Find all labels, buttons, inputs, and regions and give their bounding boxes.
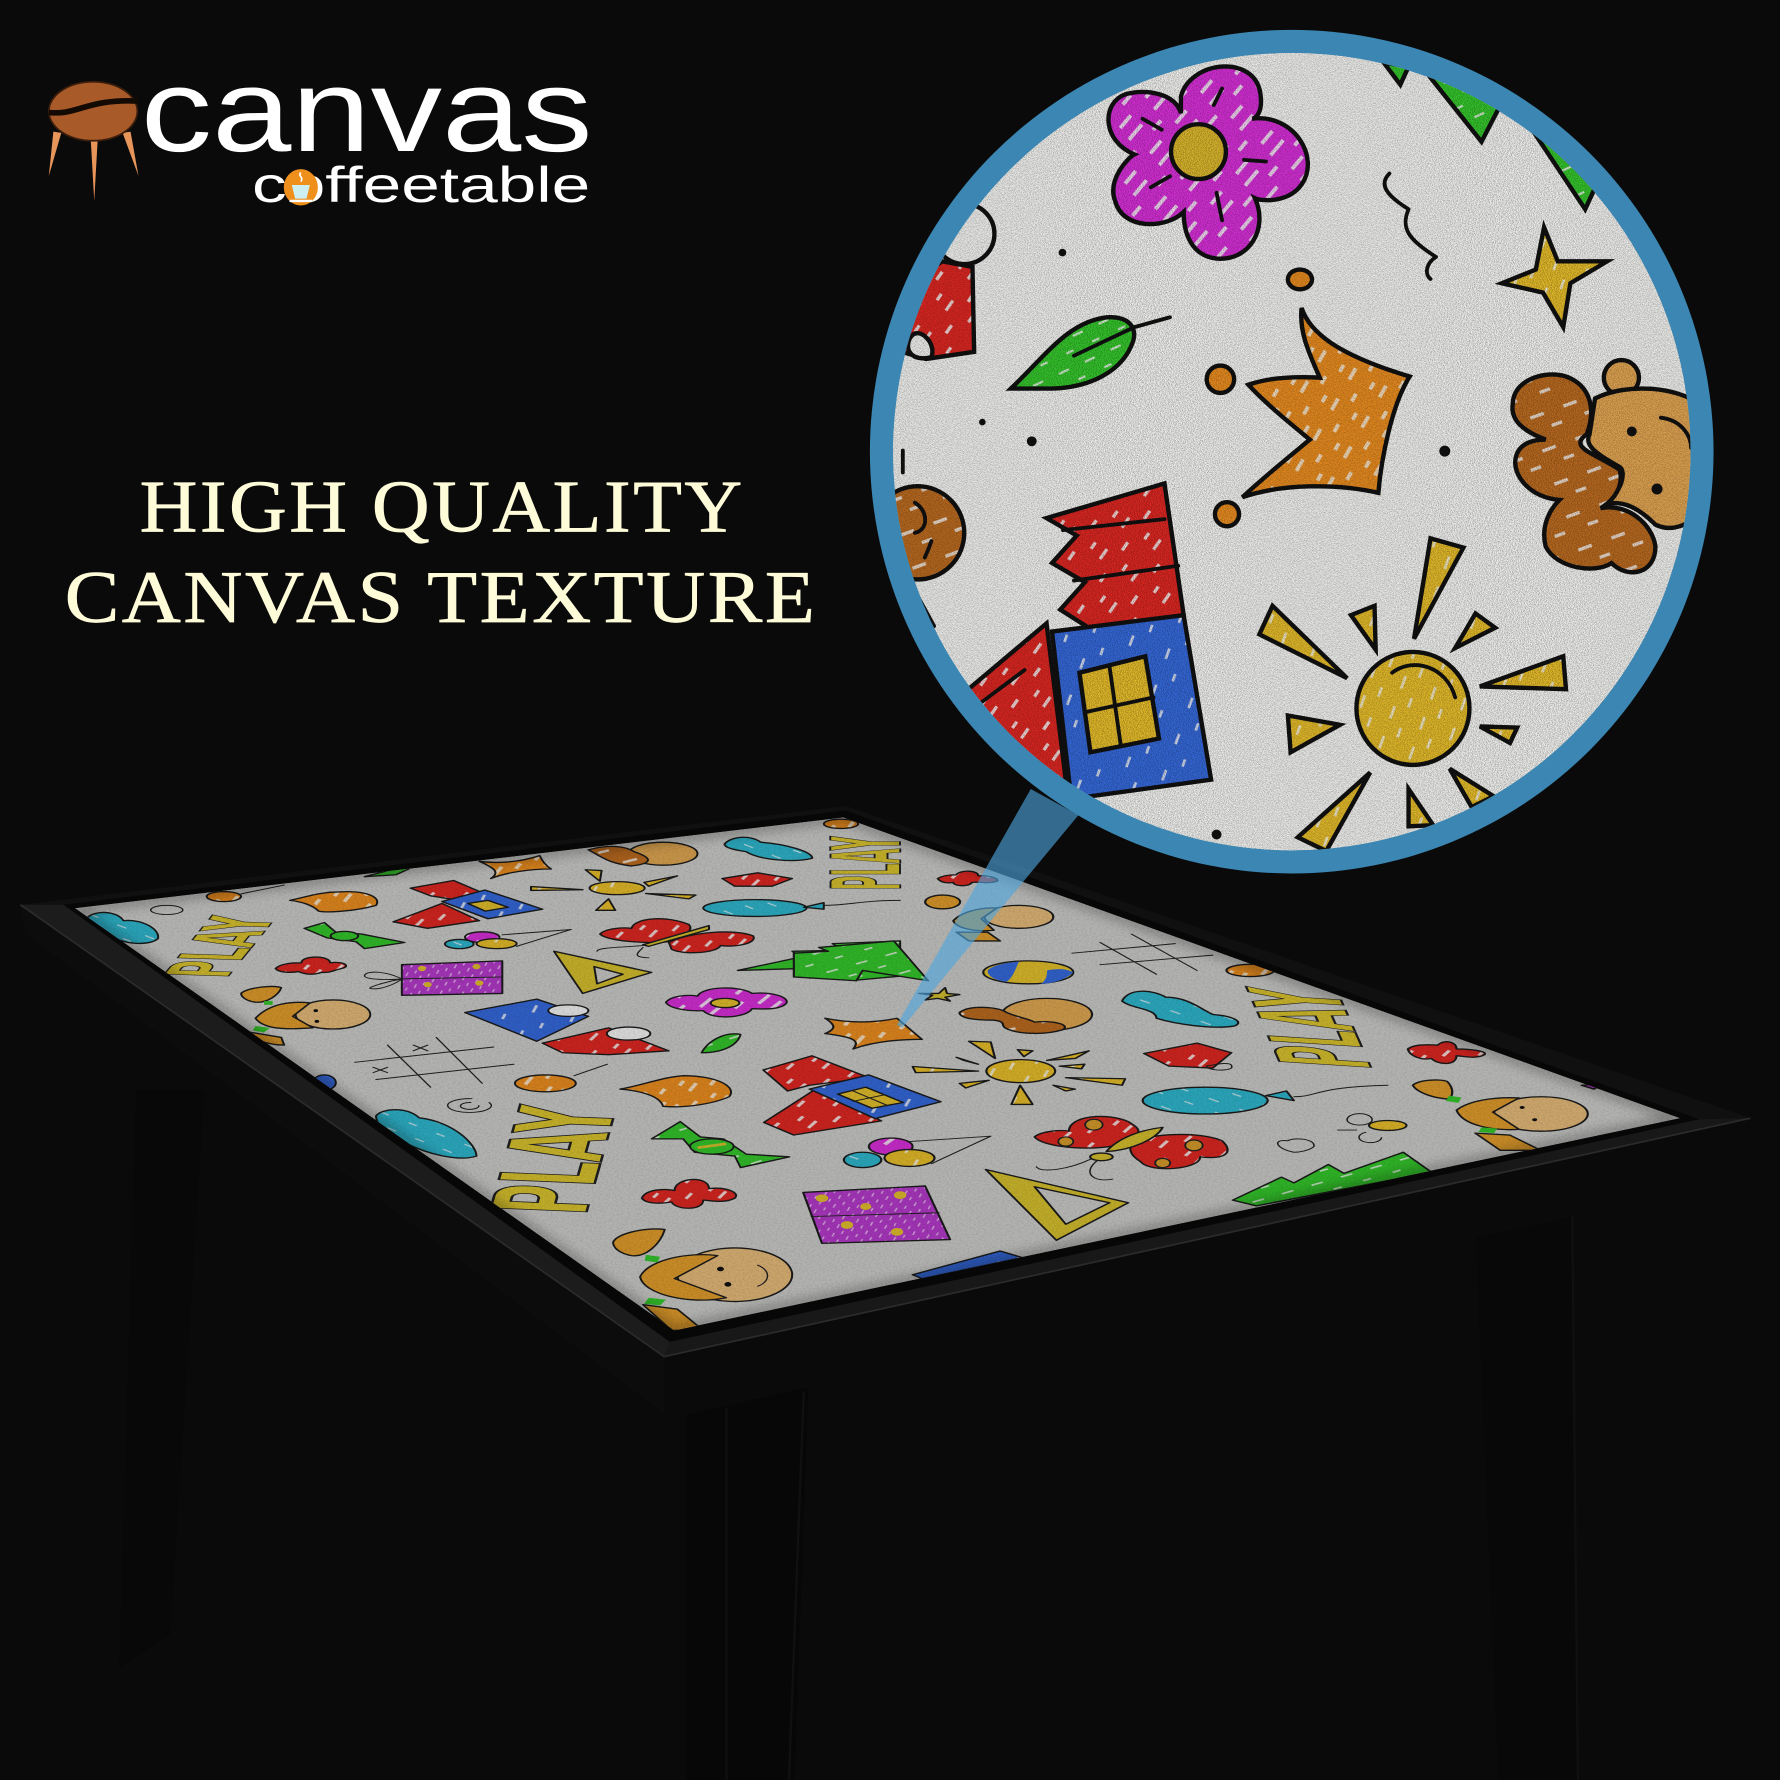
leaf — [1011, 317, 1170, 389]
line one: HIGH QUALITY — [140, 465, 745, 547]
ball — [983, 961, 1073, 984]
lollipop — [151, 885, 284, 915]
doodles: right half of table — [763, 836, 1603, 1279]
icon: coffee cup in wordmark — [284, 169, 318, 205]
truck — [465, 999, 669, 1055]
spiral — [448, 1099, 491, 1112]
cat big — [620, 1076, 731, 1107]
cat blob — [290, 892, 377, 912]
canvas weave overlay — [887, 47, 1699, 859]
logo — [49, 45, 593, 213]
big candy — [652, 1122, 789, 1168]
text: PLAY right: PLAY — [1221, 984, 1402, 1072]
tic tac toe right — [1072, 934, 1213, 974]
gift — [365, 961, 502, 995]
house big — [763, 1056, 941, 1135]
butterfly — [597, 919, 754, 958]
bear — [1512, 360, 1699, 572]
cloud right — [1122, 991, 1238, 1027]
ice cream big — [844, 1136, 991, 1168]
text: big PLAY: PLAY — [464, 1103, 647, 1217]
left red car — [893, 204, 994, 359]
table shading — [75, 817, 1680, 1330]
flower — [1108, 66, 1308, 259]
text: small PLAY: PLAY — [146, 914, 298, 979]
leaf — [702, 1034, 741, 1053]
logo wordmark: coffeetable: coffeetable — [252, 157, 590, 213]
leaf top — [365, 867, 409, 877]
ice cream — [445, 929, 571, 949]
orange dots — [1207, 270, 1312, 526]
surface edge shadow — [75, 817, 1680, 1330]
tic tac toe — [355, 1037, 514, 1087]
big cloud — [376, 1110, 476, 1158]
bear right — [960, 998, 1092, 1033]
star — [1502, 227, 1607, 327]
balloon big — [1143, 1085, 1388, 1114]
red flower top right — [938, 871, 998, 886]
logo wordmark: canvas: canvas — [141, 45, 593, 177]
red flower right — [1408, 1042, 1485, 1063]
blue ring — [870, 30, 1714, 873]
blue ball at edge — [313, 1075, 336, 1090]
red flower big — [642, 1179, 736, 1208]
girl small — [241, 986, 370, 1045]
red cup — [722, 873, 792, 886]
logo icon: coffee bean stool — [49, 82, 138, 201]
magnifier circle: canvas texture close-up — [870, 30, 1714, 873]
sun top — [531, 870, 696, 910]
tree right part — [794, 941, 928, 981]
butterfly big — [1035, 1116, 1228, 1180]
doodles: left half of table — [86, 819, 900, 1330]
bear top — [588, 842, 697, 866]
surface — [75, 817, 1680, 1330]
girl big — [613, 1229, 792, 1330]
canvas table surface with doodle print — [68, 812, 1686, 1334]
line two: CANVAS TEXTURE — [65, 556, 817, 638]
magenta flower — [666, 988, 787, 1017]
girl right — [1413, 1080, 1588, 1150]
tree pieces — [1384, 63, 1598, 209]
left partial bear — [871, 451, 964, 626]
sun — [1259, 538, 1566, 851]
star small — [919, 988, 960, 1001]
squiggle — [1385, 174, 1436, 279]
table canvas weave — [68, 812, 1686, 1334]
candy — [304, 923, 405, 949]
black dots — [979, 249, 1450, 839]
red flower — [276, 957, 346, 974]
lollipop top — [824, 819, 858, 828]
headline text — [65, 465, 817, 638]
red cup right — [1144, 1043, 1232, 1070]
ruler triangle — [554, 951, 652, 993]
sun big — [913, 1041, 1125, 1104]
crown — [1242, 308, 1410, 497]
house — [942, 483, 1211, 799]
table legs — [119, 1090, 1578, 1780]
big lollipop — [515, 1064, 607, 1092]
purple corner shape — [1582, 1083, 1603, 1089]
bee — [1338, 1114, 1406, 1143]
text: PLAY top: PLAY — [813, 836, 924, 890]
lollipop right — [1226, 964, 1274, 977]
blue corner shape — [913, 1251, 1022, 1279]
gift big — [803, 1186, 950, 1243]
cloud top — [724, 837, 812, 861]
ruler big — [986, 1169, 1128, 1240]
small cloud — [86, 912, 158, 943]
girl top right — [925, 895, 1053, 941]
tree bottom — [1233, 1152, 1432, 1206]
crown top — [479, 856, 551, 879]
table top frame — [20, 806, 1750, 1417]
canvas base — [893, 53, 1691, 850]
callout pointer beam — [897, 789, 1078, 1027]
house top — [393, 880, 542, 928]
crown — [825, 1018, 922, 1049]
heart — [1278, 1139, 1314, 1152]
balloon — [703, 900, 900, 916]
tree — [738, 941, 900, 980]
